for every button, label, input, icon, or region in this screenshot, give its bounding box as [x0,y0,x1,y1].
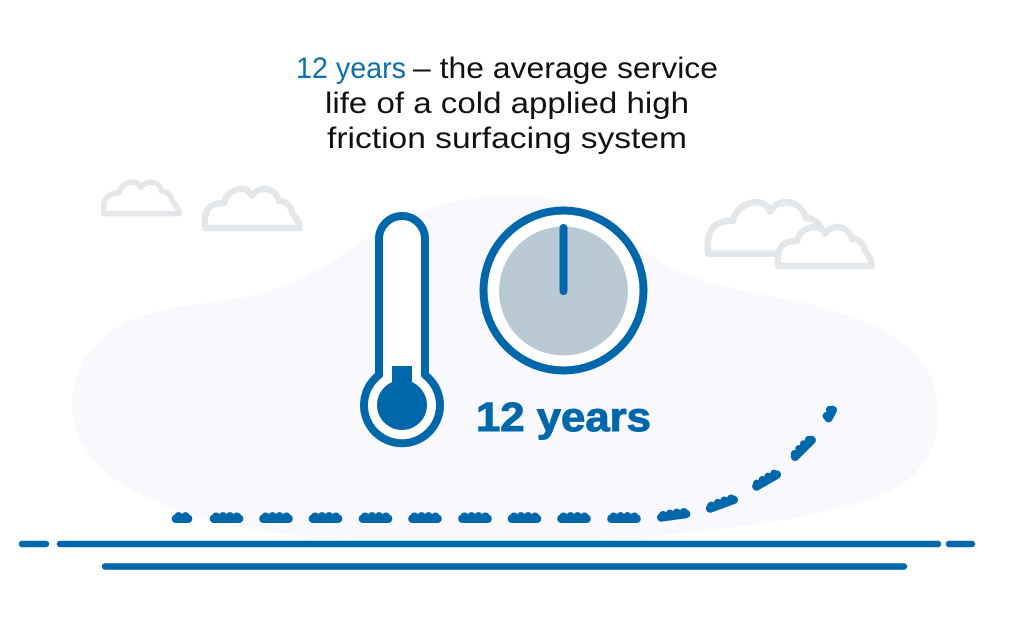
cloud: right front [778,227,872,266]
title: friction surfacing system [327,122,687,155]
pebble trail [174,404,835,520]
cloud: left [205,189,300,228]
icon: clock [484,210,644,370]
cloud: far left [104,182,179,214]
cloud: right back [708,202,835,254]
road lines [22,544,972,566]
background blob [72,195,938,542]
title [296,52,718,155]
title: life of a cold applied high [325,87,689,120]
icon: thermometer [364,216,440,443]
big label: 12 years: 12 years [476,394,651,440]
title: – the average service [413,52,718,85]
title: 12 years [296,52,406,85]
